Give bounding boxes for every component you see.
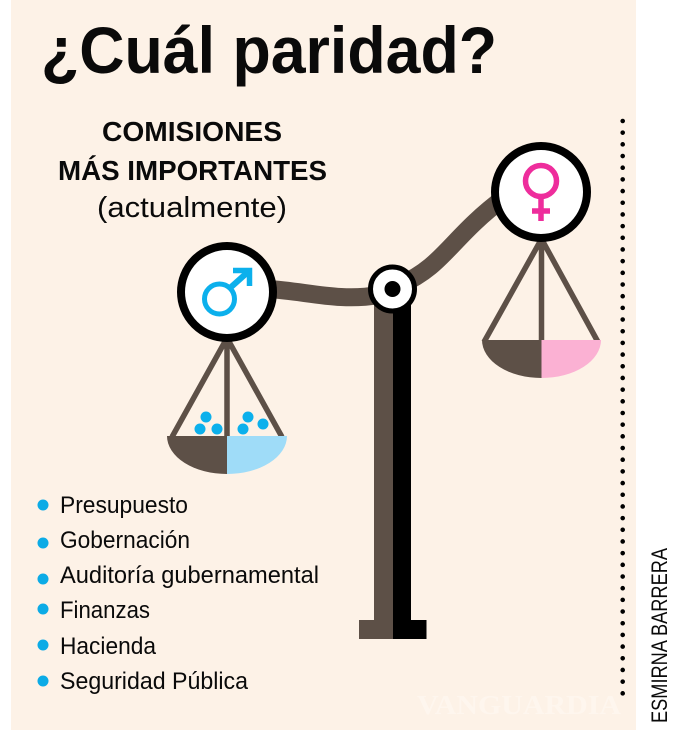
heading: comisiones más importantes: MÁS IMPORTANTES [58,155,327,186]
item: Gobernación: Gobernación [60,527,190,554]
heading: comisiones más importantes: (actualmente) [97,192,287,224]
title: ¿Cuál paridad? [41,13,497,87]
icon: female symbol circle [495,146,587,238]
item: Auditoría gubernamental: Auditoría gubernamental [60,562,319,589]
list: comisiones [38,492,319,695]
item: Seguridad Pública: Seguridad Pública [60,668,249,695]
heading: comisiones más importantes [58,116,327,224]
scale: balance [167,146,601,639]
right pan: women [482,239,601,378]
left pan: men [167,338,287,474]
item: Finanzas: Finanzas [60,597,150,624]
icon: male symbol circle [181,246,273,338]
pivot [370,267,414,311]
column [359,300,426,639]
watermark: VANGUARDIA [417,690,622,720]
beam [268,197,505,297]
item: Hacienda: Hacienda [60,633,157,660]
heading: comisiones más importantes: COMISIONES [102,116,282,147]
credit: ESMIRNA BARRERA [647,548,672,723]
item: Presupuesto: Presupuesto [60,492,188,519]
